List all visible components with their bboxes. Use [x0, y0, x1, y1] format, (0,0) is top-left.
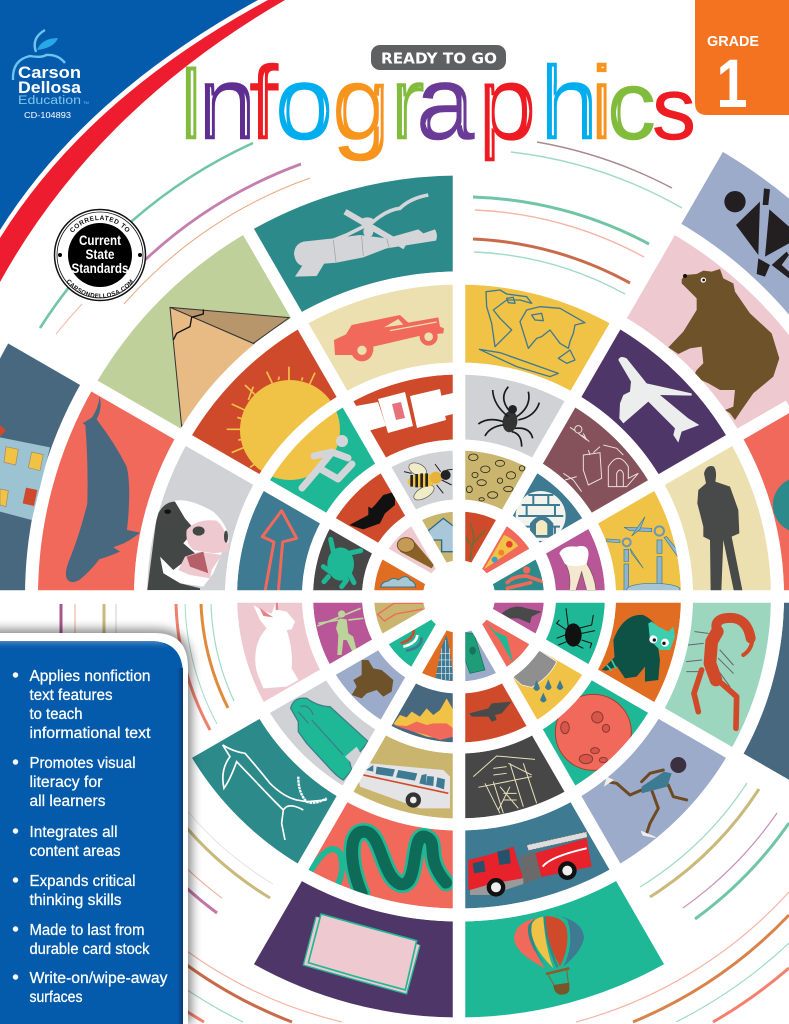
icon: antelope	[223, 745, 327, 840]
icon: frog	[323, 539, 361, 587]
ring 1 wedges	[376, 514, 542, 679]
icon: squirrel	[352, 660, 393, 698]
badge: correlated to current state standards: CORRELATED TO	[70, 216, 130, 232]
title: r	[390, 45, 425, 162]
bullet list text	[13, 668, 168, 1006]
icon: javelin thrower	[317, 608, 363, 655]
icon: skyscraper	[435, 635, 454, 681]
icon: snake	[312, 832, 446, 893]
icon: rabbit	[253, 602, 298, 688]
bullet list text: informational text	[30, 725, 151, 742]
icon: bear	[668, 269, 779, 420]
bullet list text: Made to last from	[30, 922, 144, 939]
series pill: ready to go: READY TO GO	[381, 50, 497, 68]
bullet list text: Integrates all	[30, 824, 118, 841]
icon: building	[0, 425, 50, 520]
icon: bee	[404, 460, 453, 503]
title: g	[332, 45, 390, 162]
icon: gorilla	[291, 698, 368, 780]
icon: red planet	[555, 694, 631, 770]
bullet list text: durable card stock	[30, 941, 150, 958]
ring 5 wedges	[86, 224, 789, 970]
bullet list text: literacy for	[30, 774, 102, 791]
title: h	[540, 45, 598, 162]
icon: blue wedge arrow	[262, 511, 297, 592]
icon: igloo	[516, 491, 566, 541]
icon: seatbelt	[356, 389, 453, 433]
icon: stones	[466, 454, 525, 501]
panel: features list	[0, 629, 192, 1024]
icon: fire	[393, 698, 453, 740]
icon: raccoon	[602, 615, 675, 682]
badge: correlated to current state standards	[54, 208, 146, 302]
grade tab: 1	[716, 45, 748, 122]
icon: apple and leaf	[13, 30, 65, 80]
icon: wind turbines	[607, 517, 680, 595]
logo	[13, 30, 89, 120]
arcs: lower right	[576, 783, 789, 1022]
title: c	[607, 50, 656, 160]
icon: whale	[66, 397, 140, 582]
grade tab: GRADE	[707, 33, 759, 50]
icon: tooth	[559, 546, 596, 590]
icon: jet plane	[618, 357, 699, 443]
icon: world map	[479, 290, 585, 377]
ring 4 wedges	[86, 224, 789, 969]
series pill: ready to go	[371, 45, 506, 70]
title: s	[652, 59, 696, 158]
logo: TM	[83, 100, 89, 105]
logo: Dellosa	[18, 78, 82, 97]
arcs: lower left	[180, 802, 342, 1022]
bullet list text: content areas	[30, 843, 121, 860]
icon: cow	[147, 500, 228, 590]
icon: striped shape	[401, 630, 422, 651]
bullet list text: thinking skills	[30, 892, 122, 909]
badge: correlated to current state standards: Current	[79, 232, 121, 248]
ring 6 wedges	[0, 149, 789, 597]
icon: leaf	[466, 523, 485, 560]
bullet list text: text features	[30, 687, 113, 704]
icon: khaki wedge arrow	[378, 603, 423, 621]
icon: cloud	[381, 577, 416, 587]
icon: hot air balloon	[514, 915, 584, 995]
title: p	[478, 45, 536, 162]
logo: CD-104893	[24, 110, 71, 120]
icon: rower	[507, 566, 542, 588]
bullet list text: Write-on/wipe-away	[30, 970, 168, 987]
icon: woman runner	[604, 757, 687, 837]
grade tab	[695, 0, 789, 122]
ring 3 wedges	[200, 338, 718, 855]
icon: house	[428, 518, 454, 552]
title: n	[198, 45, 256, 162]
arcs: top right	[473, 142, 682, 294]
corner swoosh	[0, 0, 285, 282]
bullet list text: surfaces	[30, 989, 83, 1006]
icon: soaring bird	[469, 702, 512, 722]
logo: Education	[18, 95, 81, 107]
icon: pizza	[484, 535, 518, 569]
ring 2 wedges	[293, 431, 625, 762]
icon: dollar bills	[465, 633, 485, 673]
icon: cave drawings	[563, 426, 638, 492]
icon: book	[303, 914, 420, 994]
badge: correlated to current state standards: Standards	[72, 260, 129, 276]
icon: pyramid	[170, 307, 289, 427]
icon: log	[397, 538, 434, 568]
title: o	[275, 45, 333, 162]
icon: spider	[478, 387, 539, 447]
icon: teal circle	[776, 483, 789, 527]
icon: house frame	[473, 756, 537, 813]
icon: black abstract symbol	[724, 188, 789, 278]
badge: correlated to current state standards: CARSONDELLOSA.COM	[67, 279, 133, 298]
bullet list text: Promotes visual	[30, 755, 136, 772]
icon: rain cloud	[513, 651, 563, 702]
title: f	[249, 45, 279, 162]
icon: man silhouette	[697, 466, 743, 592]
arcs: top left	[40, 143, 310, 334]
icon: sun	[227, 367, 340, 480]
icon: spaceship	[294, 195, 437, 277]
logo: Carson	[18, 63, 81, 82]
title: a	[416, 45, 475, 162]
bullet list text: to teach	[30, 706, 82, 723]
icon: teal bird shape	[485, 622, 513, 663]
title: i	[590, 45, 613, 162]
icon: bat	[349, 492, 395, 529]
bullet list text: all learners	[30, 793, 106, 810]
icon: car	[334, 315, 444, 361]
icon: sprinting figure	[302, 435, 352, 488]
arcs: left of wheel	[61, 604, 234, 730]
title: I	[176, 45, 206, 162]
icon: rat	[502, 607, 542, 623]
badge: correlated to current state standards: State	[86, 246, 115, 262]
bullet list text: Expands critical	[30, 873, 136, 890]
icon: scorpion	[687, 618, 753, 728]
icon: bus	[358, 763, 450, 808]
icon: tick	[557, 608, 595, 648]
icon: fire truck	[468, 832, 592, 897]
bullet list text: Applies nonfiction	[30, 668, 150, 685]
